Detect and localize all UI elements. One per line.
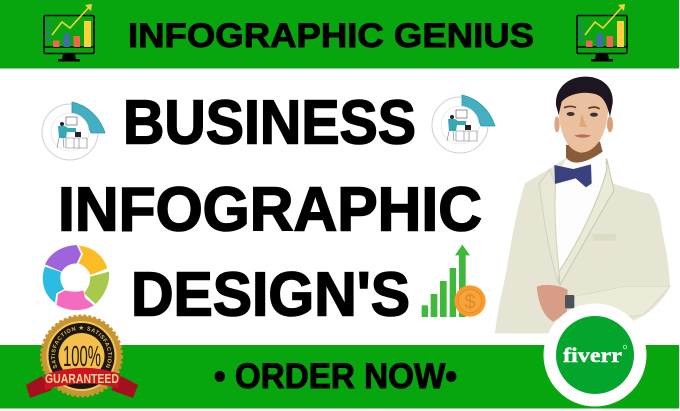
sleeve [573,287,670,318]
badge: 100% guaranteed [26,314,138,398]
badge percentage: 100% [63,341,101,373]
left lapel [539,170,559,283]
icon: growth bars with coin: $ [464,291,476,314]
jacket [495,153,670,333]
right lapel [559,158,614,285]
top green banner [0,0,679,68]
heading: design's: DESIGN'S [131,260,410,330]
icon: growth bars with coin [422,245,486,317]
face [558,90,608,153]
badge ribbon label: GUARANTEED [45,371,119,386]
heading: business: BUSINESS [123,88,416,158]
icon: monitor chart right [577,4,627,62]
ears [554,116,560,132]
icon: analytics dial left [42,102,105,160]
fiverr badge [544,304,646,406]
badge ring label: SATISFACTION ★ SATISFACTION [51,325,112,368]
icon: monitor chart left [44,4,94,62]
shirt [555,153,607,272]
bow tie [554,164,592,187]
neck [566,142,603,163]
eyes and brows [564,106,600,109]
call to action: order now: • ORDER NOW• [214,357,457,396]
heading: infographic genius: INFOGRAPHIC GENIUS [128,17,534,55]
heading: infographic: INFOGRAPHIC [58,176,482,244]
icon: analytics dial right [432,95,495,153]
hair [556,77,613,117]
icon: cycle ring [43,245,109,310]
fiverr wordmark: fiverr [563,343,622,367]
hand and watch [537,285,568,322]
portrait photo [495,77,670,333]
bottom green banner [0,345,679,408]
